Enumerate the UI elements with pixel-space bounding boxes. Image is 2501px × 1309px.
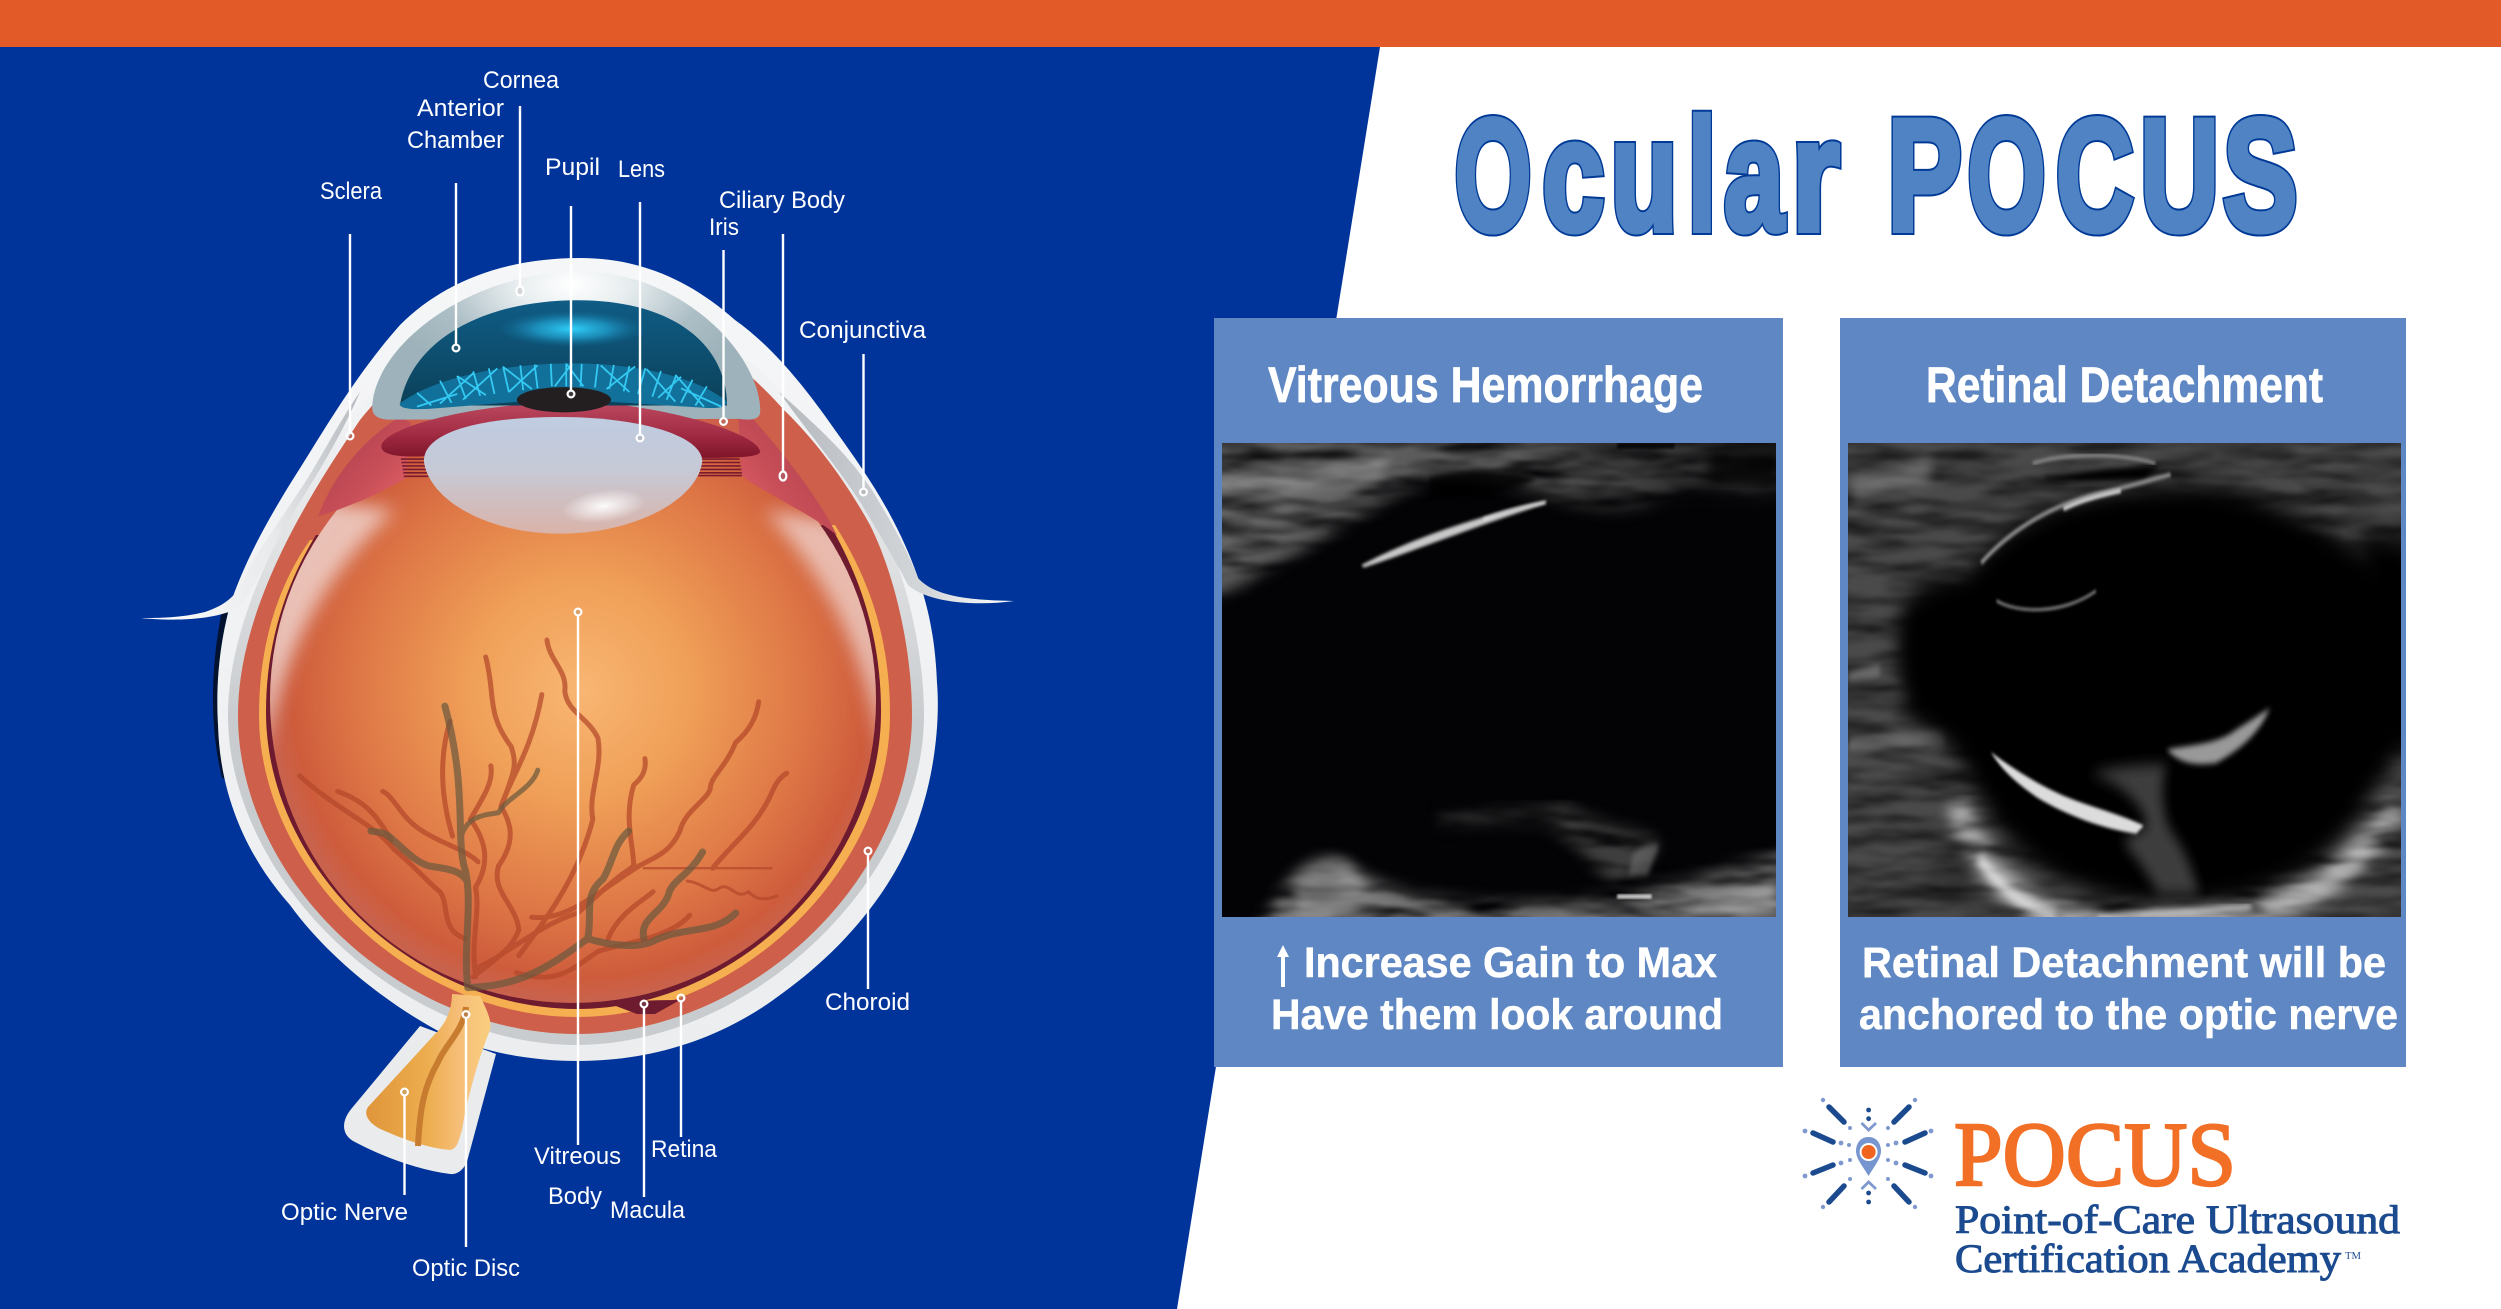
sclera [217, 258, 938, 1061]
pupil [517, 387, 611, 412]
globe anechoic interior [1898, 486, 2412, 904]
label: Choroid [825, 848, 910, 1016]
heading: Vitreous Hemorrhage: Vitreous Hemorrhage [1268, 357, 1703, 413]
label: Sclera: Sclera [320, 178, 383, 205]
bright membrane streak [1361, 501, 1546, 567]
optic nerve [366, 994, 491, 1150]
dark shadow crescent [213, 610, 232, 780]
title: O [1968, 88, 2046, 265]
detached membrane lines [1981, 475, 2171, 563]
panel: vitreous hemorrhage [1200, 318, 1797, 1067]
anatomical leader lines and labels [281, 67, 927, 1282]
label: Cornea: Cornea [483, 67, 560, 94]
title: O [1968, 88, 2046, 265]
title: u [1611, 87, 1677, 264]
retina layer [266, 525, 881, 1009]
lens [424, 417, 702, 534]
yellow sclera lining [259, 525, 890, 1017]
title: O [1455, 87, 1531, 265]
title: P [1888, 87, 1962, 265]
logo: POCUS academy [1803, 1098, 2400, 1281]
retinal blood vessels [299, 640, 787, 988]
label: Vitreous Body: Vitreous [534, 1143, 621, 1170]
logo tagline: TM [2345, 1250, 2361, 1262]
label: Optic Nerve [281, 1089, 408, 1226]
label: Optic Disc [412, 1011, 520, 1282]
title: U [2140, 86, 2219, 264]
caption: anchored to optic nerve [1859, 939, 2398, 1039]
title: a [1724, 86, 1785, 264]
label: Ciliary Body [719, 187, 845, 480]
logo tagline [1955, 1197, 2400, 1281]
icon: location pin with rays [1803, 1098, 1933, 1209]
heading: Retinal Detachment: Retinal Detachment [1926, 357, 2323, 413]
ciliary body right [738, 419, 837, 536]
logo tagline: Certification Academy [1955, 1236, 2341, 1281]
title: r [1792, 88, 1840, 265]
panel: retinal detachment [1830, 318, 2419, 1067]
ciliary body left [318, 417, 411, 516]
title: l [1688, 87, 1716, 265]
label: Anterior Chamber: Chamber [407, 127, 504, 154]
lens highlight [556, 484, 651, 529]
label: Anterior Chamber [407, 95, 504, 351]
iris [400, 363, 727, 409]
title: r [1792, 88, 1840, 265]
title: c [1542, 87, 1604, 265]
ciliary body and anterior segment [318, 272, 837, 536]
label: Iris [709, 214, 739, 425]
caption: increase gain: Have them look around [1271, 991, 1723, 1039]
title: S [2223, 87, 2297, 265]
label: Cornea [483, 67, 560, 296]
title: a [1724, 86, 1785, 264]
label: Lens [618, 156, 665, 441]
macula notch [608, 1000, 680, 1014]
logo wordmark: POCUS [1954, 1104, 2236, 1205]
zonule fibres [401, 459, 742, 476]
optic nerve sheath [344, 1026, 496, 1174]
choroid [238, 300, 912, 1034]
title: l [1688, 87, 1716, 265]
chamber highlight [497, 311, 647, 347]
vitreous body [270, 397, 876, 1003]
top orange bar [0, 0, 2501, 47]
label: Ciliary Body: Ciliary Body [719, 187, 845, 214]
anterior chamber [400, 300, 727, 405]
label: Iris: Iris [709, 214, 739, 241]
optic nerve central vessel [418, 1007, 466, 1146]
ultrasound image: retinal detachment [1848, 443, 2401, 917]
panel background [1214, 318, 1783, 1067]
conjunctiva left fold [141, 392, 360, 620]
title: u [1611, 87, 1677, 264]
title: C [2056, 86, 2134, 264]
icon: up arrow [1277, 945, 1289, 987]
blue diagonal panel [0, 47, 1380, 1309]
label: Retina: Retina [651, 1136, 718, 1163]
ultrasound image: vitreous hemorrhage [1222, 443, 1776, 917]
label: Lens: Lens [618, 156, 665, 183]
vitreous pale highlights [260, 500, 886, 760]
label: Vitreous Body [534, 609, 621, 1210]
label: Macula [610, 1001, 686, 1224]
label: Anterior Chamber: Anterior [417, 95, 504, 122]
iris fibres [417, 363, 721, 407]
label: Optic Disc: Optic Disc [412, 1255, 520, 1282]
title: c [1542, 87, 1604, 265]
title: U [2140, 86, 2219, 264]
caption: increase gain: Increase Gain to Max [1304, 939, 1717, 987]
label: Macula: Macula [610, 1197, 686, 1224]
title: O [1455, 87, 1531, 265]
conjunctiva right fold [779, 392, 1014, 603]
panel background [1840, 318, 2406, 1067]
label: Choroid: Choroid [825, 989, 910, 1016]
label: Conjunctiva [799, 317, 927, 495]
label: Retina [651, 995, 718, 1163]
logo tagline: Point-of-Care Ultrasound [1955, 1197, 2400, 1242]
label: Conjunctiva: Conjunctiva [799, 317, 927, 344]
label: Optic Nerve: Optic Nerve [281, 1199, 408, 1226]
title: P [1888, 87, 1962, 265]
label: Pupil: Pupil [545, 154, 600, 181]
eye anatomy illustration [141, 258, 1014, 1174]
label: Pupil [545, 154, 600, 397]
cornea [372, 272, 760, 420]
bright posterior rim [1956, 801, 2396, 926]
caption: increase gain [1271, 939, 1723, 1039]
title: C [2056, 86, 2134, 264]
label: Sclera [320, 178, 383, 439]
tissue wedge [2090, 764, 2199, 895]
title [1455, 86, 2297, 265]
lower wall [1254, 848, 1776, 917]
title: S [2223, 87, 2297, 265]
caption: anchored to optic nerve: Retinal Detachment will be [1862, 939, 2386, 987]
iris red band [381, 402, 760, 458]
inner sclera grey ring [228, 290, 924, 1045]
caption: anchored to optic nerve: anchored to the optic nerve [1859, 991, 2398, 1039]
label: Vitreous Body: Body [548, 1183, 602, 1210]
